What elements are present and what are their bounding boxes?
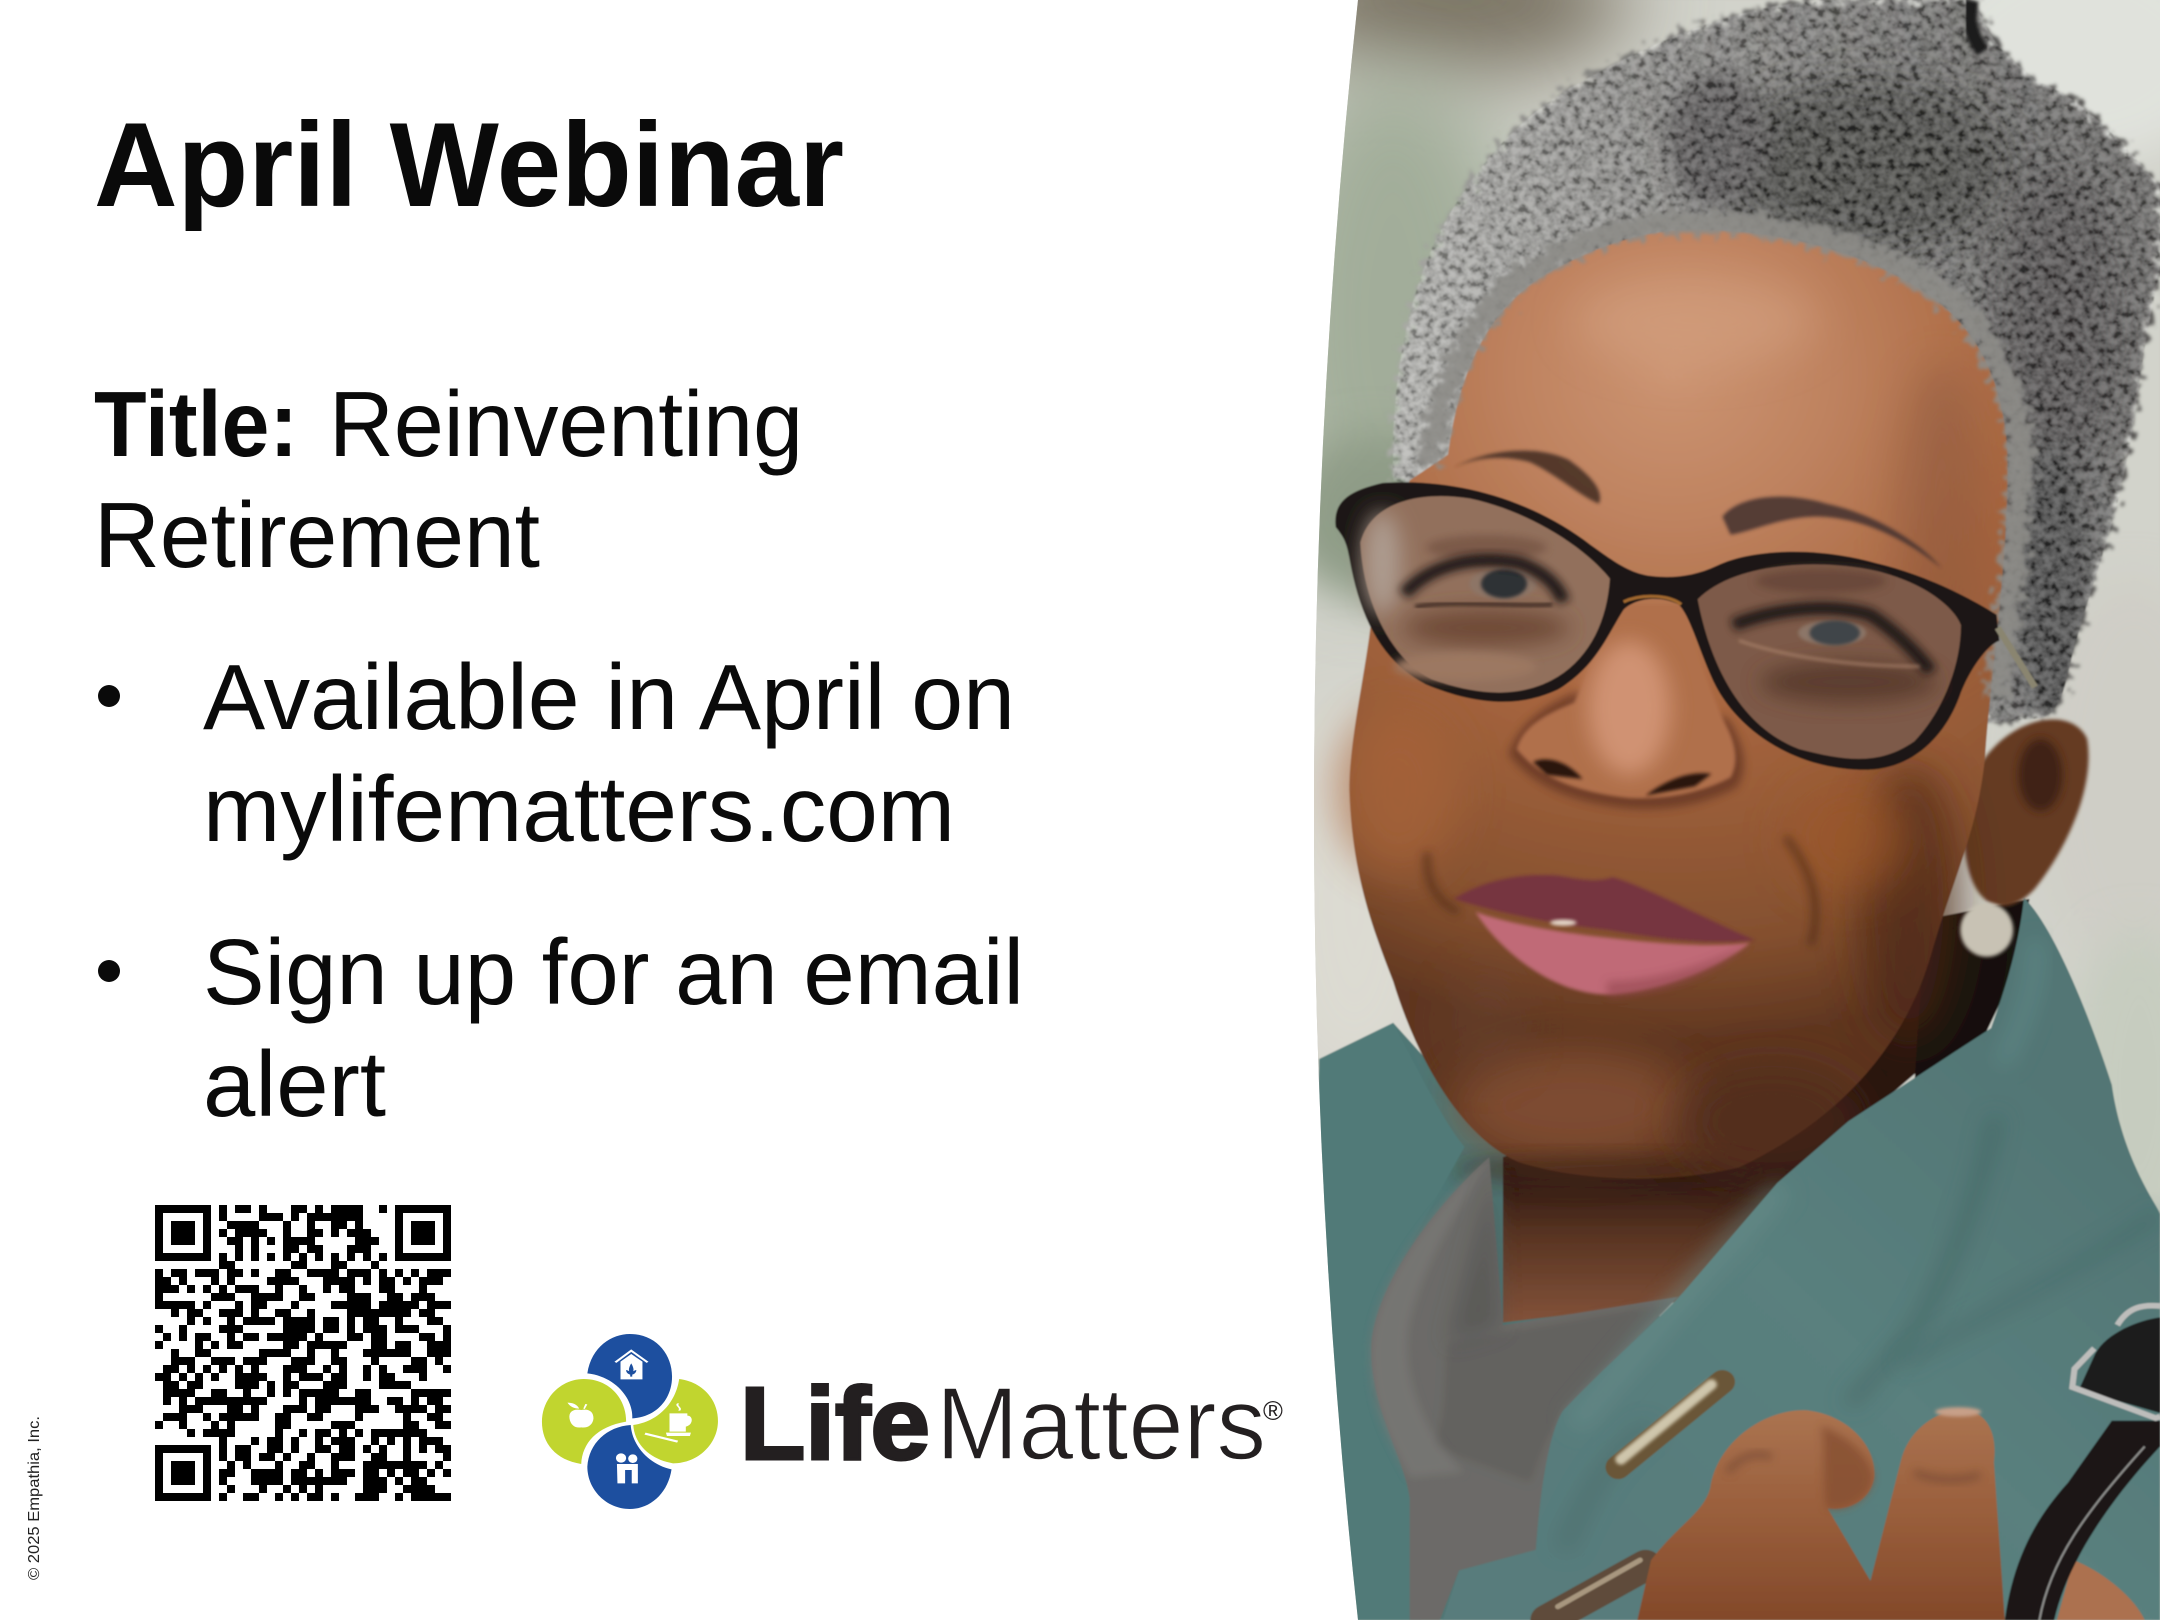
left lens bbox=[1360, 496, 1610, 693]
LifeMatters logo bbox=[542, 1334, 1283, 1509]
bullet: email alert bbox=[98, 920, 1024, 1136]
hair bbox=[1300, 0, 2160, 723]
bullet: email alert: alert bbox=[203, 1032, 386, 1136]
turtleneck bbox=[1371, 1157, 1678, 1620]
logo wordmark: Life bbox=[740, 1366, 930, 1481]
text block: webinar title: Reinventing bbox=[329, 372, 803, 476]
left jacket shoulder bbox=[1317, 1023, 1465, 1620]
photo: smiling woman with glasses bbox=[1245, 0, 2160, 1620]
lips bbox=[1454, 875, 1755, 997]
right lens bbox=[1698, 564, 1961, 759]
copyright notice: © 2025 Empathia, Inc. bbox=[26, 1416, 43, 1580]
jacket base behind the neck bbox=[1317, 1023, 1684, 1620]
glasses bbox=[1335, 482, 2035, 770]
jacket collar bbox=[1443, 898, 2160, 1620]
hand bbox=[1637, 1407, 2145, 1620]
nose bbox=[1506, 635, 1748, 812]
text block: webinar title bbox=[94, 372, 803, 587]
neck bbox=[1503, 956, 1931, 1322]
LifeMatters logo: Matters bbox=[936, 1366, 1266, 1481]
face bbox=[1338, 230, 2008, 1184]
heading: April Webinar: April Webinar bbox=[94, 98, 844, 232]
bullet: availability bbox=[98, 645, 1015, 861]
background bokeh bbox=[1314, 0, 2160, 1213]
earring bbox=[1960, 903, 2013, 957]
eyebrows bbox=[1454, 451, 1942, 568]
bag strap and buckle bbox=[2005, 1306, 2160, 1620]
icon: four-petal logo mark bbox=[542, 1334, 718, 1509]
bullet: availability: mylifematters.com bbox=[203, 757, 955, 861]
bullet: availability: Available in April on bbox=[203, 645, 1015, 749]
bullet: email alert: Sign up for an email bbox=[203, 920, 1024, 1024]
QR code bbox=[155, 1205, 451, 1501]
buttons bbox=[1547, 1382, 1722, 1620]
fuzzy hairline over forehead bbox=[1429, 222, 2021, 697]
smile lines bbox=[1427, 837, 1816, 945]
ear bbox=[1963, 719, 2089, 906]
text block: webinar title: Retirement bbox=[94, 483, 540, 587]
text block: webinar title: Title: bbox=[94, 372, 298, 476]
dark shadow under ear bbox=[1914, 899, 2030, 1085]
LifeMatters logo: ® bbox=[1263, 1396, 1283, 1426]
